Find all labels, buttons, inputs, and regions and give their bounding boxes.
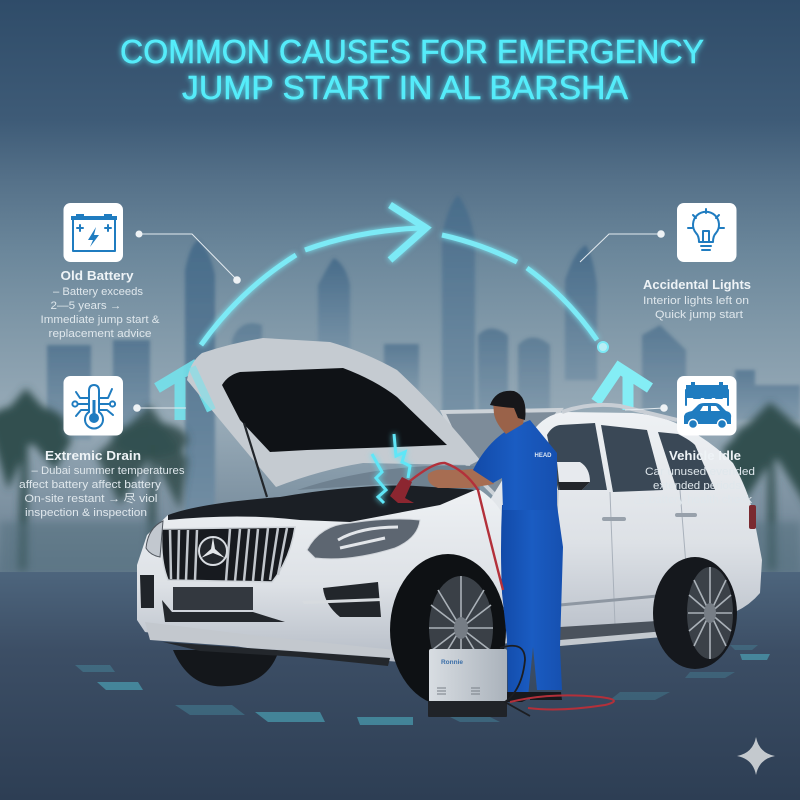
text: old battery details: replacement advice	[48, 328, 152, 340]
front body and bumper	[137, 490, 510, 662]
open hood	[187, 338, 480, 487]
starter black cable	[500, 646, 530, 716]
text: vehicle idle details: ⚠ battery health check	[634, 493, 753, 506]
fog lamp right	[323, 582, 381, 617]
side windows	[547, 423, 715, 492]
hair	[490, 391, 526, 420]
roof rail	[562, 405, 677, 420]
text: extreme drain details	[19, 465, 185, 519]
icon: light bulb	[677, 203, 736, 262]
spark bolts	[372, 434, 410, 503]
text: extreme drain details: On-site restant → 尽 viol	[24, 492, 158, 505]
lower bumper trim	[145, 622, 396, 658]
clamp	[390, 477, 414, 503]
connector: accidental lights	[580, 230, 665, 262]
head	[493, 392, 525, 434]
connector: old battery	[136, 230, 241, 284]
text: extreme drain details: – Dubai summer temperatures	[32, 465, 185, 477]
red ground cable	[510, 695, 614, 709]
text: old battery details: Immediate jump start &	[40, 314, 160, 326]
car	[137, 338, 762, 706]
arc segment descending 1	[442, 235, 517, 262]
text: accidental lights details: Interior lights left on	[643, 295, 749, 307]
heading: old battery: Old Battery	[60, 269, 134, 283]
windshield and roof behind hood	[443, 410, 560, 500]
connector: extreme drain	[133, 404, 186, 412]
mechanic	[428, 391, 563, 702]
grille	[162, 527, 295, 582]
jumper cable	[395, 463, 503, 590]
left arrowhead	[157, 367, 212, 420]
text: old battery details	[40, 286, 160, 340]
lower intake	[162, 600, 285, 622]
bolt left	[372, 454, 386, 503]
engine bay	[168, 485, 475, 522]
heading: accidental lights: Accidental Lights	[643, 278, 751, 292]
star logo	[199, 537, 227, 565]
grille bars	[170, 528, 287, 581]
arc segment with top arrow	[305, 228, 422, 250]
shoes	[506, 692, 562, 702]
heading: vehicle idle: Vehicle Idle	[669, 449, 741, 463]
text: vehicle idle details	[634, 466, 755, 506]
connector: vehicle idle	[625, 404, 668, 412]
license plate	[173, 587, 253, 610]
arm	[428, 468, 494, 488]
shirt	[473, 420, 557, 510]
right headlight	[307, 519, 420, 559]
background palms	[0, 388, 800, 570]
hood strut	[244, 423, 267, 497]
background sky	[0, 0, 800, 600]
icon: thermometer circuit	[64, 376, 123, 436]
text: vehicle idle details: Car unused evended	[645, 466, 755, 478]
text: vehicle idle details: extended periods	[653, 480, 742, 492]
starter label: Ronnie	[441, 659, 463, 666]
rear car body	[300, 412, 762, 650]
arrowhead overlay on hood	[192, 367, 212, 410]
hood inner panel	[222, 368, 447, 452]
text: old battery details: – Battery exceeds	[53, 286, 143, 298]
text: extreme drain details: inspection & inspection	[25, 507, 147, 519]
front right rim	[429, 576, 493, 680]
arc end node	[598, 342, 608, 352]
starter vent	[437, 688, 480, 694]
title	[120, 33, 704, 106]
rear wheel	[653, 557, 737, 669]
text: extreme drain details: affect battery affect battery	[19, 479, 162, 491]
right arrowhead	[596, 368, 650, 410]
ground	[0, 572, 800, 800]
text: old battery details: 2—5 years →	[50, 300, 122, 312]
starter casing	[429, 649, 507, 702]
ground ring dashes	[75, 645, 770, 725]
icon: calendar and car	[677, 376, 736, 436]
sill	[560, 620, 677, 646]
left headlight	[146, 521, 163, 557]
heading: extreme drain: Extremic Drain	[45, 449, 141, 463]
title: JUMP START IN AL BARSHA	[182, 69, 628, 106]
windscreen strip	[297, 466, 480, 490]
starter base	[428, 701, 507, 717]
side mirror	[557, 462, 590, 490]
city skyline	[47, 195, 800, 560]
tail light	[749, 505, 756, 529]
text: accidental lights details: Quick jump start	[655, 309, 743, 321]
door lines and handles	[555, 490, 695, 625]
front left wheel	[173, 650, 279, 686]
icon: sparkle watermark	[737, 737, 775, 775]
underside	[163, 642, 390, 666]
arc arrow	[157, 205, 650, 420]
text: accidental lights details	[643, 295, 749, 321]
arrowhead top	[390, 205, 426, 260]
title: COMMON CAUSES FOR EMERGENCY	[120, 33, 704, 70]
arc segment left	[201, 255, 296, 345]
back logo: HEAD	[534, 453, 552, 459]
horizon band	[0, 522, 800, 574]
bolt right	[394, 434, 410, 478]
icon: car battery	[64, 203, 123, 262]
left intake	[140, 575, 154, 608]
front right wheel arch and tyre	[390, 554, 506, 706]
portable jump starter	[428, 646, 530, 717]
trousers	[501, 505, 563, 697]
arc segment descending 2	[527, 268, 597, 340]
